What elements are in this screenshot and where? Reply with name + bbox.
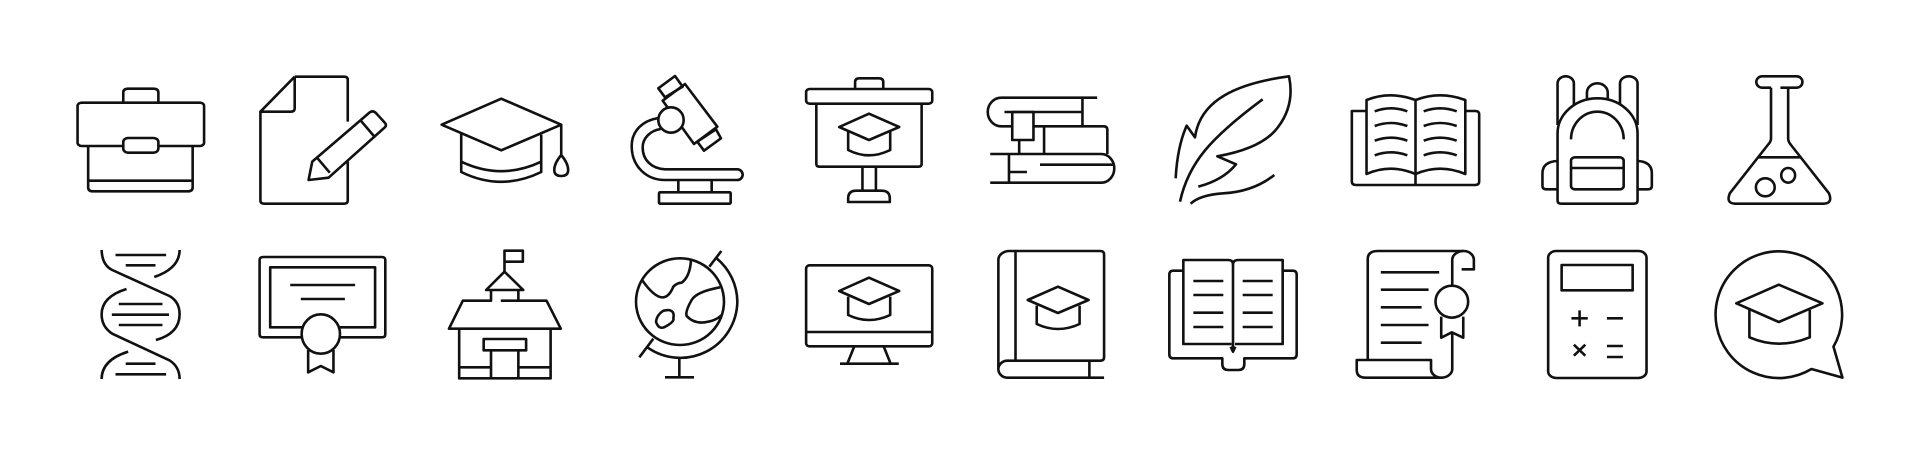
icon: dna helix — [102, 250, 180, 379]
icon: document with pencil — [260, 77, 386, 204]
icon: backpack — [1542, 76, 1652, 204]
icon: presentation board with cap — [806, 78, 932, 202]
icon: globe on stand — [636, 251, 737, 377]
icon: open book with straight lines — [1169, 260, 1297, 370]
icon: briefcase — [78, 89, 204, 191]
icon: monitor with cap — [806, 265, 932, 364]
icon: feather quill — [1176, 76, 1291, 204]
icon: scroll with seal — [1357, 251, 1474, 378]
icon: book with cap — [998, 251, 1104, 378]
icon: speech bubble with cap — [1716, 251, 1842, 378]
icon: chemistry flask — [1729, 76, 1830, 204]
icon: diploma certificate — [260, 257, 385, 372]
icon: open book with curved lines — [1352, 95, 1479, 185]
icon: stack of books — [988, 98, 1114, 183]
icon: microscope — [632, 76, 743, 204]
icon: calculator — [1548, 251, 1647, 378]
icon: graduation cap with tassel — [442, 99, 568, 182]
icon: school building — [449, 251, 561, 378]
